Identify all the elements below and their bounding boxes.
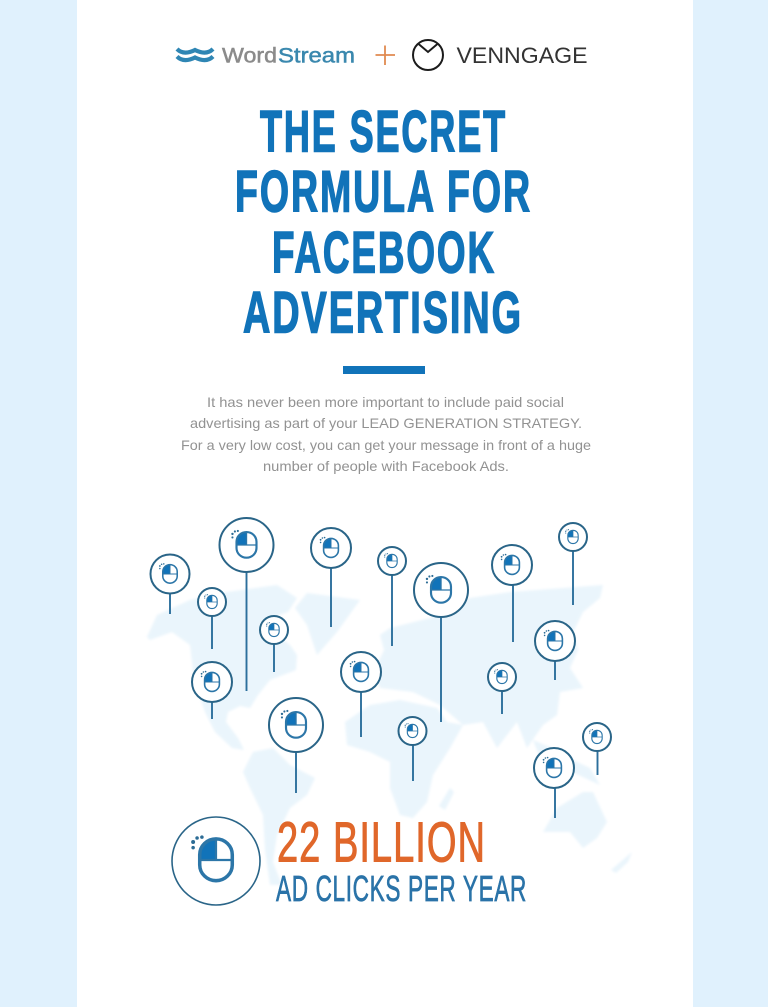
pin 7	[559, 523, 587, 605]
pin 1	[150, 554, 190, 614]
wordmark: Stream: Stream	[278, 44, 355, 68]
title: ADVERTISING	[243, 280, 523, 346]
icon: large mouse click badge	[172, 817, 260, 905]
pin 14	[269, 698, 323, 793]
intro paragraph: advertising as part of your LEAD GENERATION STRATEGY.	[190, 415, 582, 431]
pin 3	[311, 528, 351, 627]
pin 8	[198, 588, 226, 649]
intro paragraph: It has never been more important to include paid social	[207, 394, 564, 410]
pin 15	[398, 717, 426, 781]
intro paragraph	[181, 394, 591, 474]
title underline	[343, 366, 425, 374]
pin 9	[260, 616, 288, 672]
pin 16	[583, 723, 611, 775]
stat: 22 billion: 22 BILLION	[277, 810, 486, 874]
pin 17	[534, 748, 574, 818]
pin 13	[192, 662, 232, 719]
pin 5	[414, 563, 468, 722]
icon: WordStream waves	[177, 49, 213, 60]
stat label: ad clicks per year: AD CLICKS PER YEAR	[276, 868, 527, 909]
logo: Venngage	[413, 40, 588, 70]
title	[235, 100, 532, 346]
title: THE SECRET	[260, 100, 507, 164]
logo: WordStream	[177, 44, 355, 68]
wordmark: VENNGAGE: VENNGAGE	[456, 43, 588, 68]
intro paragraph: number of people with Facebook Ads.	[263, 458, 509, 474]
plus sign	[376, 46, 395, 65]
intro paragraph: For a very low cost, you can get your message in front of a huge	[181, 437, 591, 453]
icon: Venngage clock	[413, 40, 443, 70]
pin 6	[492, 545, 532, 642]
pin 11	[488, 663, 516, 714]
world map	[147, 585, 632, 885]
title: FACEBOOK	[272, 220, 496, 286]
pin 10	[535, 621, 575, 680]
pin 4	[378, 547, 406, 646]
pin 12	[341, 652, 381, 737]
title: FORMULA FOR	[235, 160, 532, 224]
wordmark: Word: Word	[222, 44, 277, 68]
pin 2	[220, 518, 274, 691]
